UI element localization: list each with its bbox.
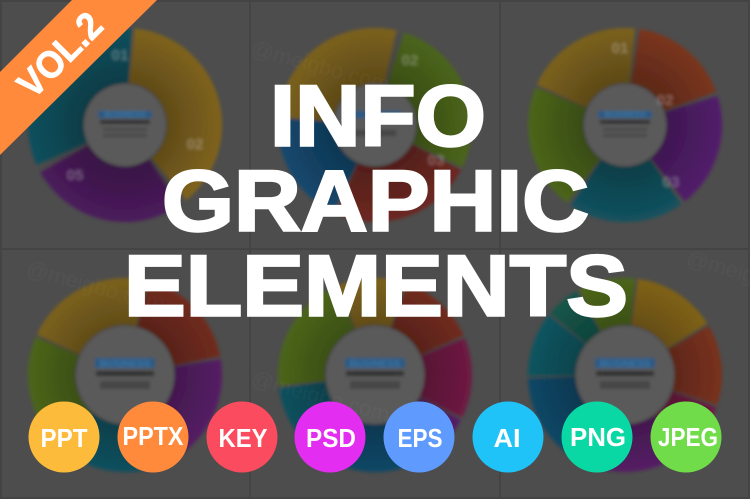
wheel panel: top left: INFOGRAPHIC [108, 120, 143, 126]
wheel panel: top right: 03 [663, 174, 679, 191]
wheel panel: top left: 05 [67, 167, 83, 184]
badge: AI: AI [494, 423, 520, 453]
watermark text: @meigbo.com [249, 366, 393, 427]
wheel panel: top left: 02 [187, 136, 203, 153]
wheel panel: bottom centre [271, 271, 479, 479]
badge: AI [472, 402, 544, 472]
badge: PNG [562, 402, 632, 472]
badge: PPT [28, 402, 100, 472]
wheel panel: bottom left [21, 271, 229, 479]
ribbon label: VOL.2 [10, 5, 111, 106]
watermark text [24, 36, 750, 427]
badge: PPT: PPT [40, 423, 88, 453]
wheel panel: top centre [278, 28, 472, 222]
badge: PPTX [118, 402, 188, 472]
wheel panel: top right: 02 [657, 92, 673, 109]
wheel panel: top left: BUSINESS [105, 110, 146, 119]
wheel panel: top centre: 03 [428, 152, 444, 169]
wheel panel: top centre: 02 [402, 52, 418, 69]
badge: PSD: PSD [306, 423, 356, 453]
wheel panel: bottom right: INFOGRAPHIC [604, 372, 647, 378]
format badges [28, 402, 722, 472]
watermark text: @meigbo.com [24, 256, 168, 317]
badge: KEY: KEY [218, 423, 268, 453]
wheel panel: bottom right: BUSINESS [599, 359, 651, 370]
title line 3: ELEMENTS [124, 238, 628, 334]
badge: KEY [206, 402, 278, 472]
badge: JPEG [650, 402, 722, 472]
title line 1: INFO [270, 68, 486, 164]
wheel panel: top right: INFOGRAPHIC [608, 120, 643, 126]
title line 2: GRAPHIC [162, 154, 589, 250]
title [124, 68, 628, 334]
watermark text: @meigbo.com [249, 36, 393, 97]
badge: JPEG: JPEG [658, 422, 718, 452]
wheel panel: top left [28, 28, 222, 222]
badge: EPS [384, 402, 454, 472]
badge: EPS: EPS [398, 423, 442, 453]
wheel panel: bottom right [521, 271, 729, 479]
corner ribbon [0, 0, 157, 155]
badge: PSD [294, 402, 366, 472]
wheel panel: top left: 01 [112, 47, 128, 64]
wheel panel: bottom centre: INFOGRAPHIC [354, 372, 397, 378]
badge: PPTX: PPTX [122, 421, 184, 451]
wheel panel: bottom left: INFOGRAPHIC [104, 372, 147, 378]
wheel panel: bottom centre: BUSINESS [349, 359, 401, 370]
wheel panel: top right [528, 28, 722, 222]
badge: PNG: PNG [570, 422, 626, 452]
wheel panel: bottom left: BUSINESS [99, 359, 151, 370]
wheel panel: top right: 01 [612, 40, 628, 57]
wheel panel: top right: BUSINESS [605, 110, 646, 119]
